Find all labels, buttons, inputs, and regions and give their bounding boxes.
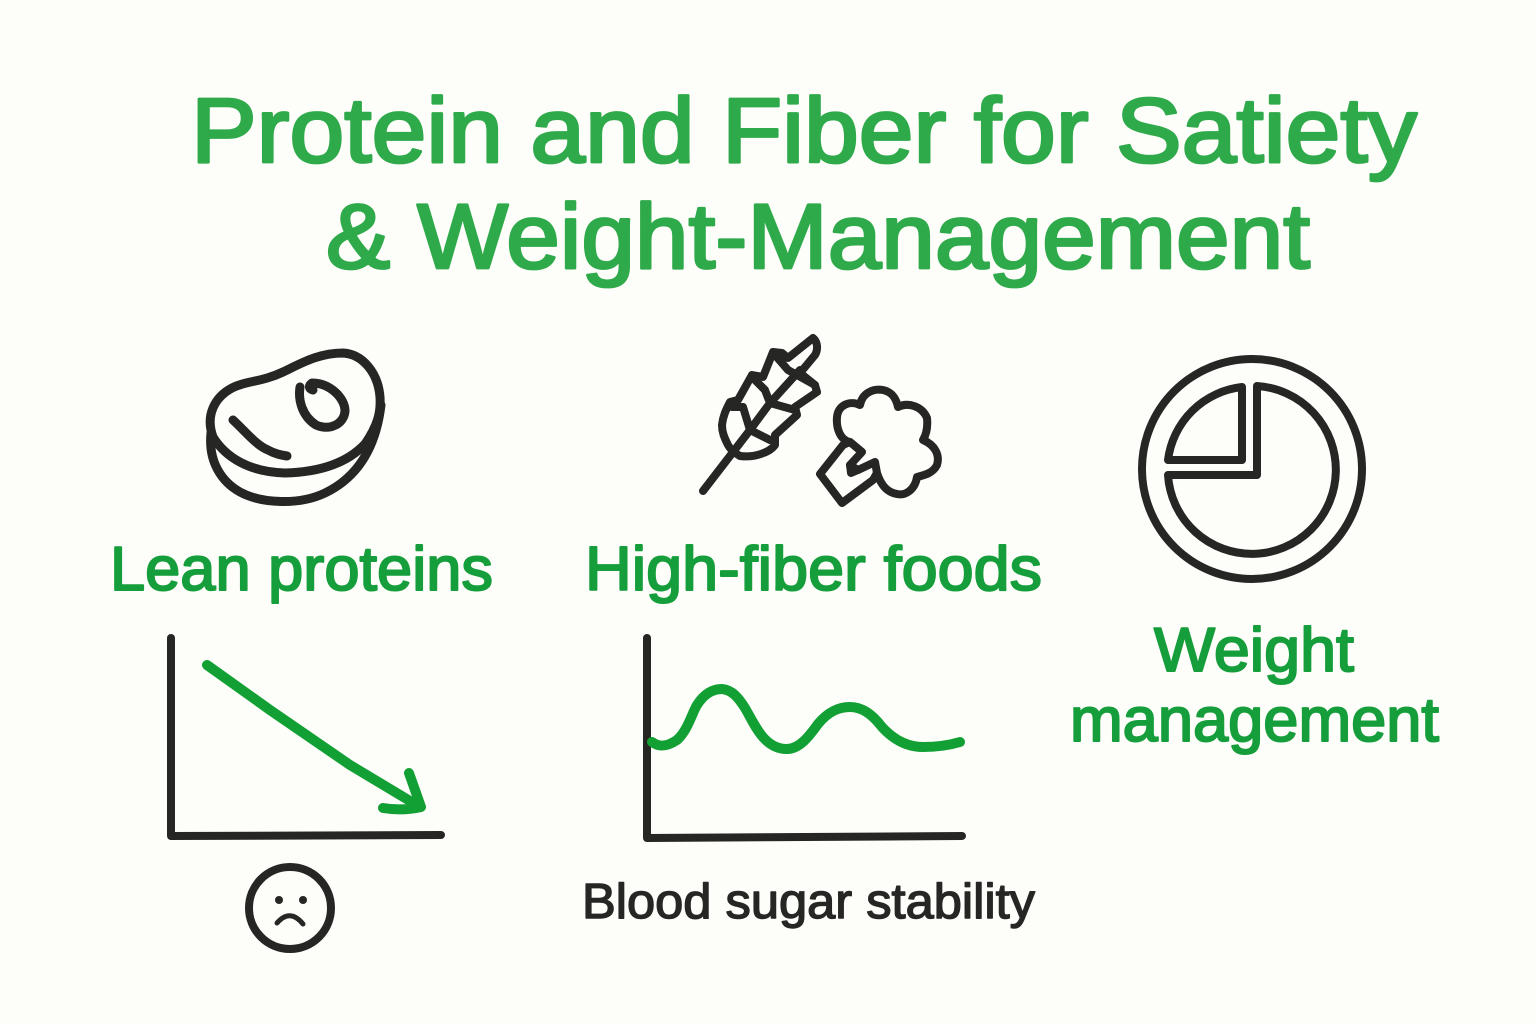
label: high-fiber foods: High-fiber foods xyxy=(585,535,1042,604)
label: weight management: management xyxy=(1070,686,1439,755)
label: lean proteins: Lean proteins xyxy=(110,535,493,604)
chart: blood sugar stability xyxy=(647,638,962,838)
line: blood sugar wave xyxy=(652,689,960,749)
icon: sad face xyxy=(249,867,331,949)
icon: wheat stalk xyxy=(703,338,817,491)
icon: meat steak xyxy=(210,353,381,502)
label: blood sugar stability: Blood sugar stability xyxy=(582,875,1036,929)
label: weight management xyxy=(1070,616,1439,755)
title xyxy=(191,80,1417,288)
icon: broccoli xyxy=(820,390,938,503)
chart: declining hunger xyxy=(171,638,441,836)
title: Protein and Fiber for Satiety xyxy=(191,80,1417,182)
icon: pie chart in circle xyxy=(1142,359,1362,579)
title: & Weight-Management xyxy=(326,186,1310,288)
label: weight management: Weight xyxy=(1154,616,1354,685)
arrow: downward trend xyxy=(207,665,421,809)
